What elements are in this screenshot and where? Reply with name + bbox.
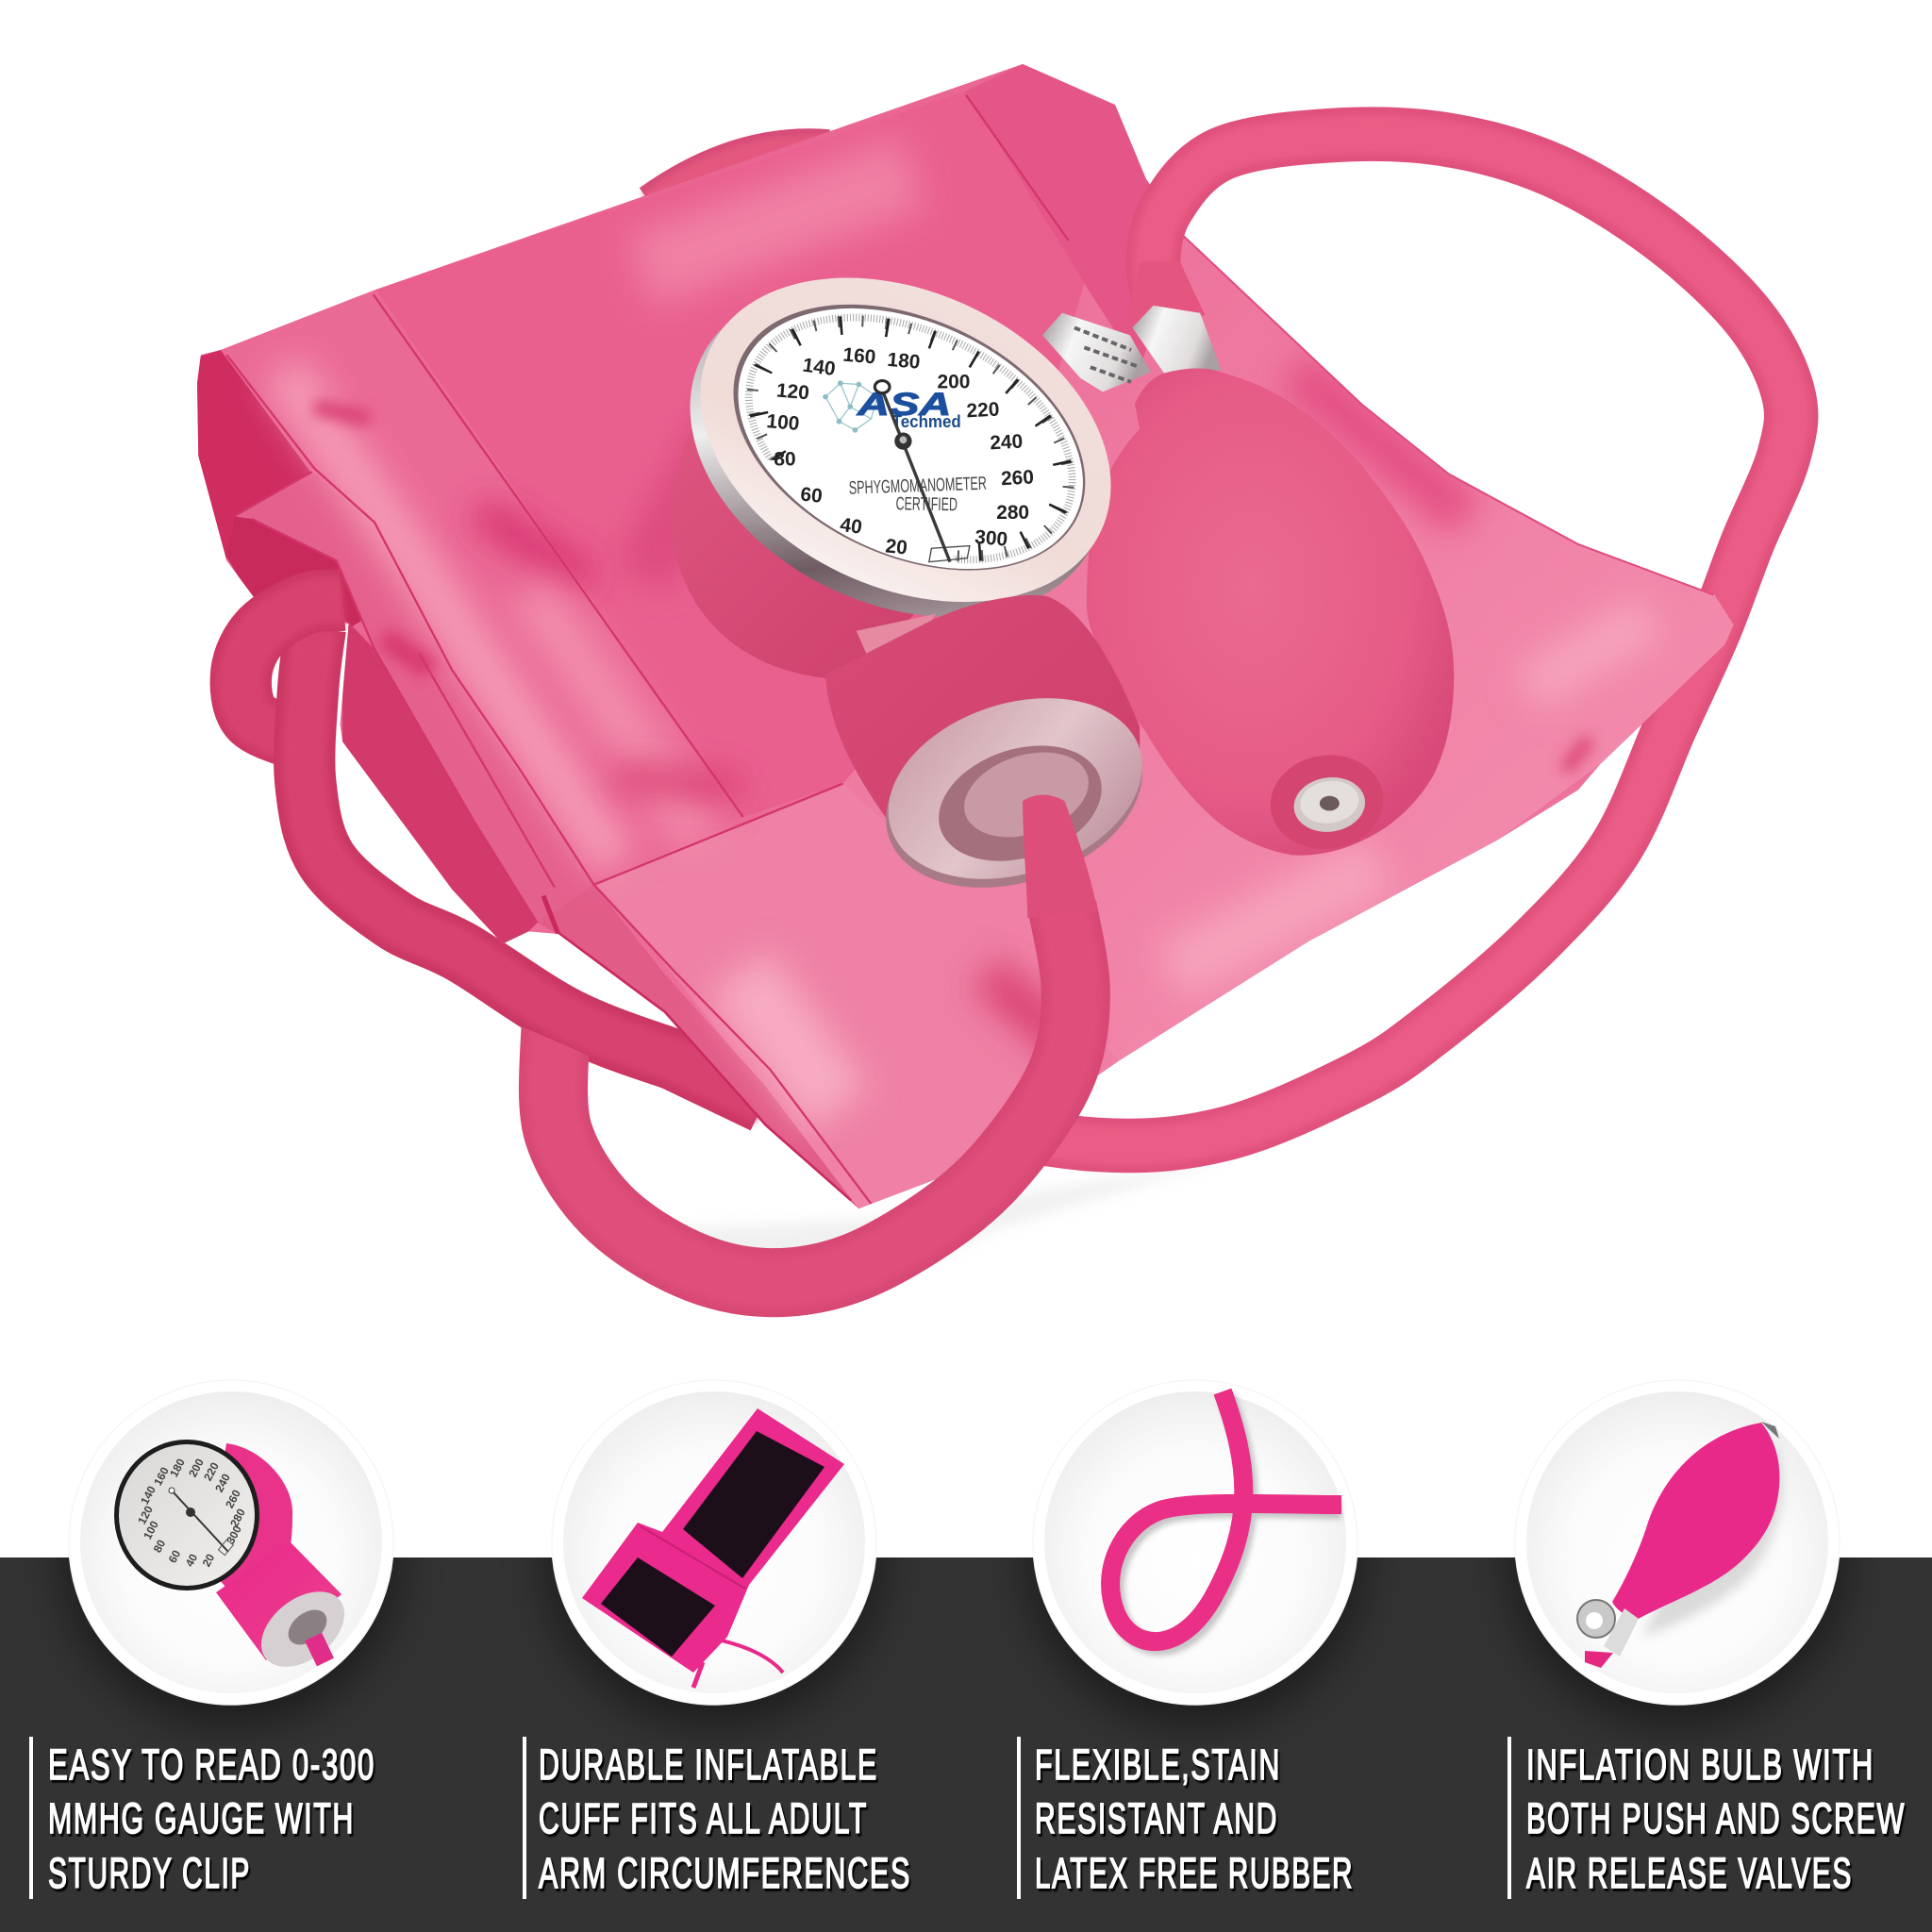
caption 2: [523, 1737, 911, 1899]
feature 1: gauge: [69, 1380, 393, 1705]
caption 2: DURABLE INFLATABLE: [539, 1740, 878, 1789]
circle badge: [69, 1380, 393, 1705]
icon: gauge with pink housing: 240: [212, 1472, 233, 1494]
long air tube: left section: [305, 628, 764, 1103]
caption 1: EASY TO READ 0-300: [48, 1740, 375, 1789]
second fold: [236, 515, 592, 922]
icon: gauge with pink housing: 20: [200, 1552, 217, 1569]
dark interior under second fold: [226, 516, 370, 628]
lower panel: [596, 796, 1119, 1075]
dial numbers: 300: [974, 526, 1008, 551]
caption 1: MMHG GAUGE WITH: [48, 1794, 355, 1842]
caption 2: CUFF FITS ALL ADULT: [539, 1794, 868, 1842]
certification text: [848, 474, 987, 515]
dial numbers: 60: [799, 483, 824, 508]
icon: gauge with pink housing: 220: [201, 1460, 222, 1483]
needle: [874, 381, 950, 562]
cuff silhouette: [197, 64, 1734, 1208]
dial numbers: 180: [887, 349, 921, 374]
caption 3: [1017, 1737, 1354, 1899]
feature 4: inflation bulb: [1515, 1380, 1840, 1705]
caption 1: STURDY CLIP: [48, 1849, 251, 1897]
ASA Techmed logo: [823, 380, 961, 433]
icon: gauge with pink housing: 40: [183, 1552, 200, 1569]
lower dark folds: [342, 616, 537, 943]
circle badge: [552, 1380, 876, 1705]
caption 3: FLEXIBLE,STAIN: [1035, 1740, 1281, 1789]
certification text: SPHYGMOMANOMETER: [848, 474, 987, 499]
icon: gauge with pink housing: 260: [223, 1488, 243, 1510]
left tube knot: [241, 600, 342, 740]
icon: gauge with pink housing: 100: [141, 1519, 161, 1541]
dial numbers: 200: [938, 371, 970, 392]
bulb end valve: [1264, 748, 1390, 857]
dial numbers: 160: [842, 344, 876, 368]
front left panel: [221, 290, 617, 881]
dial numbers: 140: [801, 355, 837, 380]
rubber gauge back: [671, 419, 937, 680]
dial numbers: 40: [839, 514, 863, 539]
gauge rubber cylinder: [825, 595, 1140, 874]
icon: gauge with pink housing: 60: [166, 1548, 183, 1565]
scale ticks: [745, 313, 1075, 569]
icon: gauge with pink housing: 120: [135, 1504, 156, 1526]
ASA Techmed logo: ASA: [857, 387, 951, 423]
circle badge: [1033, 1380, 1357, 1705]
back panel right of second seam: [966, 64, 1150, 358]
squeeze bulb: [1087, 369, 1454, 857]
dial numbers: 100: [766, 410, 800, 435]
certification text: CERTIFIED: [895, 493, 958, 515]
icon: gauge with pink housing: 140: [138, 1484, 158, 1507]
dial numbers: 220: [966, 399, 1000, 422]
feature 2: cuff: [552, 1380, 876, 1705]
tube neck into valve: [1128, 261, 1205, 323]
icon: gauge with pink housing: 180: [167, 1457, 188, 1479]
inner dark hem: [197, 350, 310, 599]
caption 3: RESISTANT AND: [1035, 1794, 1278, 1842]
ASA Techmed logo: Techmed: [892, 411, 961, 431]
dark footer band: [0, 1557, 1932, 1932]
knot upper arm in front of hem: [241, 600, 342, 740]
bottom fold strip: [537, 885, 862, 1214]
icon: gauge with pink housing: 200: [186, 1457, 207, 1479]
icon: gauge with pink housing: 80: [151, 1538, 168, 1555]
right flap: [599, 105, 1734, 1214]
dial numbers: 80: [774, 449, 796, 471]
icon: gauge with pink housing: 280: [227, 1507, 248, 1529]
icon: gauge with pink housing: 160: [151, 1465, 172, 1488]
clipped fabric regions: [197, 64, 1734, 1214]
upper panel: [376, 205, 1085, 817]
caption 2: ARM CIRCUMFERENCES: [539, 1849, 911, 1897]
long air tube: [740, 134, 1791, 1146]
circle badge: [1515, 1380, 1840, 1705]
seams and hems: [226, 95, 1714, 1204]
upper tube section in front of cuff: [1126, 121, 1232, 298]
caption 3: LATEX FREE RUBBER: [1035, 1849, 1354, 1897]
icon: gauge with pink housing: 300: [224, 1524, 244, 1546]
caption 1: [29, 1737, 375, 1899]
folded cuff fabric: [197, 64, 1734, 1214]
dial numbers: 120: [775, 379, 810, 404]
chrome flange: [862, 667, 1166, 919]
icon: pink bulb with chrome valve: [1577, 1422, 1782, 1668]
dial numbers: 20: [884, 535, 908, 559]
dial numbers: 260: [1001, 466, 1035, 490]
badge shadows on dark band: [57, 1557, 1853, 1732]
small scale box: [929, 546, 970, 562]
knurled metal valve: [1042, 306, 1221, 391]
tube arc behind cuff: [653, 152, 828, 207]
soft floor shadow: [591, 1158, 1232, 1288]
fabric shimmer: highlights and shadows: [283, 173, 1651, 1109]
gauge tube: [553, 794, 1098, 1283]
icon: open cuff with velcro: [582, 1408, 844, 1688]
dial numbers: 240: [990, 431, 1024, 454]
dial numbers: 280: [996, 502, 1029, 524]
dial numbers: [766, 344, 1035, 559]
icon: gauge with pink housing: [114, 1440, 358, 1682]
main product photo: pink blood pressure cuff with gauge and bulb: [197, 64, 1791, 1288]
icon: looped rubber tube: [1110, 1391, 1341, 1646]
dial: bezel and face: [691, 277, 1111, 617]
feature 3: tube: [1033, 1380, 1357, 1705]
caption 4: [1507, 1737, 1906, 1899]
